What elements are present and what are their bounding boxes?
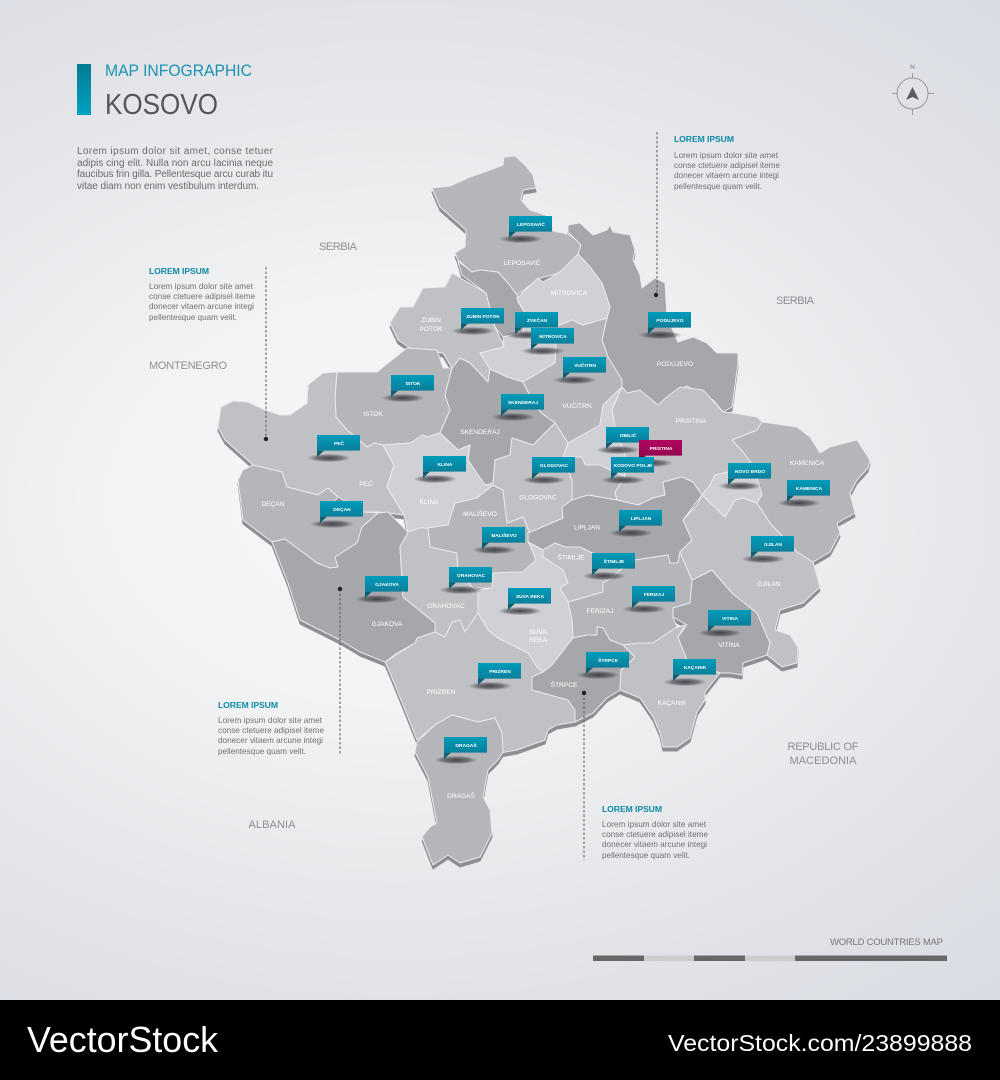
pin: Orahovac (439, 567, 492, 594)
region name labels: ZUBIN (421, 317, 441, 324)
pin: Skenderaj (491, 394, 544, 421)
pin: Kaçanik (663, 659, 716, 686)
pin: Lipljan (609, 510, 662, 537)
callout: top right: pellentesque quam velit. (674, 182, 762, 191)
region name labels: GLOGOVAC (519, 494, 557, 502)
pin: Kosovo Polje (601, 457, 654, 484)
icon: compass: N (910, 64, 915, 71)
region: Zvečan (458, 261, 525, 337)
pin: Zubin Potok: ZUBIN POTOK (466, 314, 500, 320)
region: Ferizaj (568, 552, 692, 645)
callout: top right: conse ctetuere adipisel iteme (674, 161, 780, 170)
region name labels: FERIZAJ (587, 608, 613, 615)
region name labels: ŠTRPCE (551, 680, 578, 689)
region name labels: KAMENICA (790, 460, 825, 467)
pin: Kamenica (777, 480, 830, 507)
pin: Glogovac (522, 457, 575, 484)
pin: Vučitrn (553, 357, 606, 384)
pin: Gjakova (355, 576, 408, 603)
callout: top right: Lorem ipsum dolor site amet (674, 151, 779, 160)
region name labels: REKA (529, 637, 548, 644)
region name labels: GJAKOVA (372, 621, 403, 628)
scale bar with caption: WORLD COUNTRIES MAP (830, 937, 943, 948)
region name labels: LIPLJAN (574, 524, 600, 532)
region: Orahovac (400, 528, 478, 637)
pin: Peć: PEĆ (334, 439, 344, 447)
footer image id: VectorStock.com/23899888 (668, 1030, 972, 1056)
footer band (0, 1000, 1000, 1080)
pin: Vitina (698, 610, 751, 637)
callout: bottom centre (582, 691, 708, 860)
pin: Dragaš (434, 737, 487, 764)
neighbouring country labels: SERBIA (776, 295, 815, 307)
pin: Prizren (468, 663, 521, 690)
region: Glogovac (493, 423, 572, 533)
callout: bottom left: conse ctetuere adipisel iteme (218, 726, 324, 735)
intro text: adipis cing elit. Nulla non arcu lacinia neque (77, 158, 273, 169)
pin: Lipljan: LIPLJAN (631, 516, 652, 522)
region: Mališevo (428, 485, 536, 588)
region name labels: SKENDERAJ (460, 429, 500, 436)
footer brand: VectorStock (27, 1019, 219, 1060)
pin: Dragaš: DRAGAŠ (455, 741, 477, 749)
region: Leposavić (432, 156, 581, 295)
callout: left (149, 266, 268, 441)
region: Lipljan (528, 477, 702, 563)
map of Kosovo (218, 156, 870, 865)
callout: bottom left: pellentesque quam velit. (218, 747, 306, 756)
region name labels: SUVA (529, 629, 547, 636)
pin: Deçan (310, 501, 363, 528)
neighbouring country labels: REPUBLIC OF (788, 741, 859, 753)
intro text (77, 146, 274, 192)
callout: top right (654, 132, 780, 297)
pin: Pristina (capital) (629, 440, 682, 467)
pin: Kaçanik: KAÇANIK (684, 665, 707, 671)
callout: top right: LOREM IPSUM (674, 134, 734, 144)
pin: Štimlje (582, 553, 635, 580)
region: Klina (383, 433, 493, 533)
pin: Kosovo Polje: KOSOVO POLJE (614, 463, 653, 469)
pin: Zubin Potok (451, 308, 504, 335)
region: Vitina (673, 570, 770, 675)
region: Skenderaj (440, 358, 555, 485)
neighbouring country labels: MACEDONIA (790, 755, 857, 767)
region: Mitrovica (480, 254, 610, 382)
callout: bottom centre: LOREM IPSUM (602, 804, 662, 814)
callout: left: LOREM IPSUM (149, 266, 209, 276)
region: Štimlje (543, 543, 635, 602)
pin: Zvečan (505, 312, 558, 339)
intro text: faucibus frin gilla. Pellentesque arcu curab itu (77, 169, 273, 180)
region name labels: ISTOK (363, 411, 383, 418)
subtitle: MAP INFOGRAPHIC (105, 62, 252, 80)
accent bar (77, 64, 91, 115)
pin: Vitina: VITINA (722, 616, 738, 622)
region name labels: DEÇAN (261, 501, 285, 508)
callout: left: pellentesque quam velit. (149, 313, 237, 322)
intro text: vitae diam non enim vestibulum interdum. (77, 181, 259, 192)
region name labels: MALIŠEVO (463, 509, 497, 518)
title block (77, 62, 252, 121)
pin: Klina: KLINA (438, 462, 453, 468)
callout: left: conse ctetuere adipisel iteme (149, 292, 255, 301)
callout: bottom centre: Lorem ipsum dolor site amet (602, 820, 707, 829)
pin: Štrpce (576, 652, 629, 679)
pin: Zvečan: ZVEČAN (527, 317, 548, 324)
neighbouring country labels (149, 241, 859, 831)
region: Zubin Potok (390, 273, 504, 382)
region name labels: KAÇANIK (658, 700, 687, 707)
callout: bottom centre: conse ctetuere adipisel iteme (602, 830, 708, 839)
pin: Obilić: OBILIĆ (620, 431, 637, 439)
pin: Skenderaj: SKENDERAJ (508, 400, 538, 406)
pin: Vučitrn: VUČITRN (574, 362, 596, 369)
region: Novo Brdo (702, 472, 762, 517)
pin: Pristina (capital): PRISTINA (650, 446, 673, 452)
neighbouring country labels: ALBANIA (248, 819, 296, 831)
pin: Obilić (596, 427, 649, 454)
pin: Podujevo (638, 312, 691, 339)
pin: Mitrovica: MITROVICA (539, 334, 567, 340)
title: KOSOVO (105, 89, 218, 121)
region: Obilić (563, 387, 625, 477)
icon: compass (892, 64, 934, 115)
callout: left: Lorem ipsum dolor site amet (149, 282, 254, 291)
region name labels: VUČITRN (562, 401, 592, 410)
region: Istok (335, 348, 452, 447)
pin: Gjilan (741, 536, 794, 563)
pin: Deçan: DEÇAN (333, 507, 351, 513)
callout: top right: donecer vitaem arcune integi (674, 171, 779, 180)
pin: Mališevo (472, 527, 525, 554)
callout: bottom left: LOREM IPSUM (218, 700, 278, 710)
intro text: Lorem ipsum dolor sit amet, conse tetuer (77, 146, 274, 157)
region: Gjakova (272, 512, 435, 662)
callout: left: donecer vitaem arcune integi (149, 302, 254, 311)
region: Kosovo Polje (563, 457, 625, 500)
region: Suva Reka (478, 542, 573, 672)
pin: Štimlje: ŠTIMLJE (604, 557, 625, 565)
region: Podujevo (568, 223, 738, 412)
pin: Ferizaj: FERIZAJ (644, 592, 664, 598)
callout: bottom centre: pellentesque quam velit. (602, 851, 690, 860)
callout: bottom left: Lorem ipsum dolor site amet (218, 716, 323, 725)
pin: Štrpce: ŠTRPCE (598, 656, 619, 664)
region name labels: DRAGAŠ (447, 791, 476, 800)
region name labels: GJILAN (757, 581, 781, 588)
callout: bottom left: donecer vitaem arcune integi (218, 736, 323, 745)
region: Peć (218, 372, 404, 515)
pin: Peć (307, 435, 360, 462)
pin: Leposavić (499, 216, 552, 243)
region name labels: POTOK (420, 326, 443, 333)
callout: bottom centre: donecer vitaem arcune integi (602, 840, 707, 849)
region: Štrpce (532, 627, 635, 722)
region: Dragaš (415, 715, 503, 865)
region: Gjilan (680, 495, 820, 667)
pin: Gjilan: GJILAN (764, 542, 782, 548)
pin: Istok (381, 375, 434, 402)
region name labels: LEPOSAVIĆ (504, 258, 541, 267)
region: Vučitrn (523, 318, 622, 443)
region name labels: PEĆ (359, 479, 373, 488)
region name labels (261, 258, 825, 800)
region: Pristina (612, 387, 762, 505)
region name labels: PODUJEVO (657, 361, 693, 368)
neighbouring country labels: SERBIA (319, 241, 358, 253)
region: Kamenica (732, 422, 870, 562)
region: Prizren (385, 613, 575, 753)
pin: Prizren: PRIZREN (489, 669, 511, 675)
pin: Podujevo: PODUJEVO (656, 318, 684, 324)
region: Kaçanik (620, 625, 720, 747)
region: Deçan (238, 465, 378, 568)
pin: Novo Brdo: NOVO BRDO (735, 469, 765, 475)
pin: Gjakova: GJAKOVA (375, 582, 399, 588)
pin: Ferizaj (622, 586, 675, 613)
pin: Glogovac: GLOGOVAC (540, 463, 569, 469)
pin: Kamenica: KAMENICA (796, 486, 823, 492)
region name labels: PRIZREN (427, 689, 456, 696)
pin: Orahovac: ORAHOVAC (457, 573, 486, 579)
region name labels: VITINA (718, 642, 740, 649)
pin: Mališevo: MALIŠEVO (491, 531, 517, 539)
neighbouring country labels: MONTENEGRO (149, 360, 227, 372)
region name labels: ORAHOVAC (427, 603, 465, 610)
pin: Suva Reka (498, 588, 551, 615)
region name labels: PRISTINA (676, 418, 707, 425)
pin: Istok: ISTOK (406, 381, 421, 387)
pin: Mitrovica (521, 328, 574, 355)
region name labels: ŠTIMLJE (557, 552, 585, 562)
pin: Suva Reka: SUVA REKA (516, 594, 545, 600)
pin: Klina (413, 456, 466, 483)
pin: Leposavić: LEPOSAVIĆ (517, 220, 545, 228)
callout: bottom left (218, 587, 342, 756)
pin: Novo Brdo (718, 463, 771, 490)
region name labels: MITROVICA (551, 290, 588, 297)
region name labels: KLINA (419, 499, 439, 506)
scale bar with caption (593, 937, 947, 961)
